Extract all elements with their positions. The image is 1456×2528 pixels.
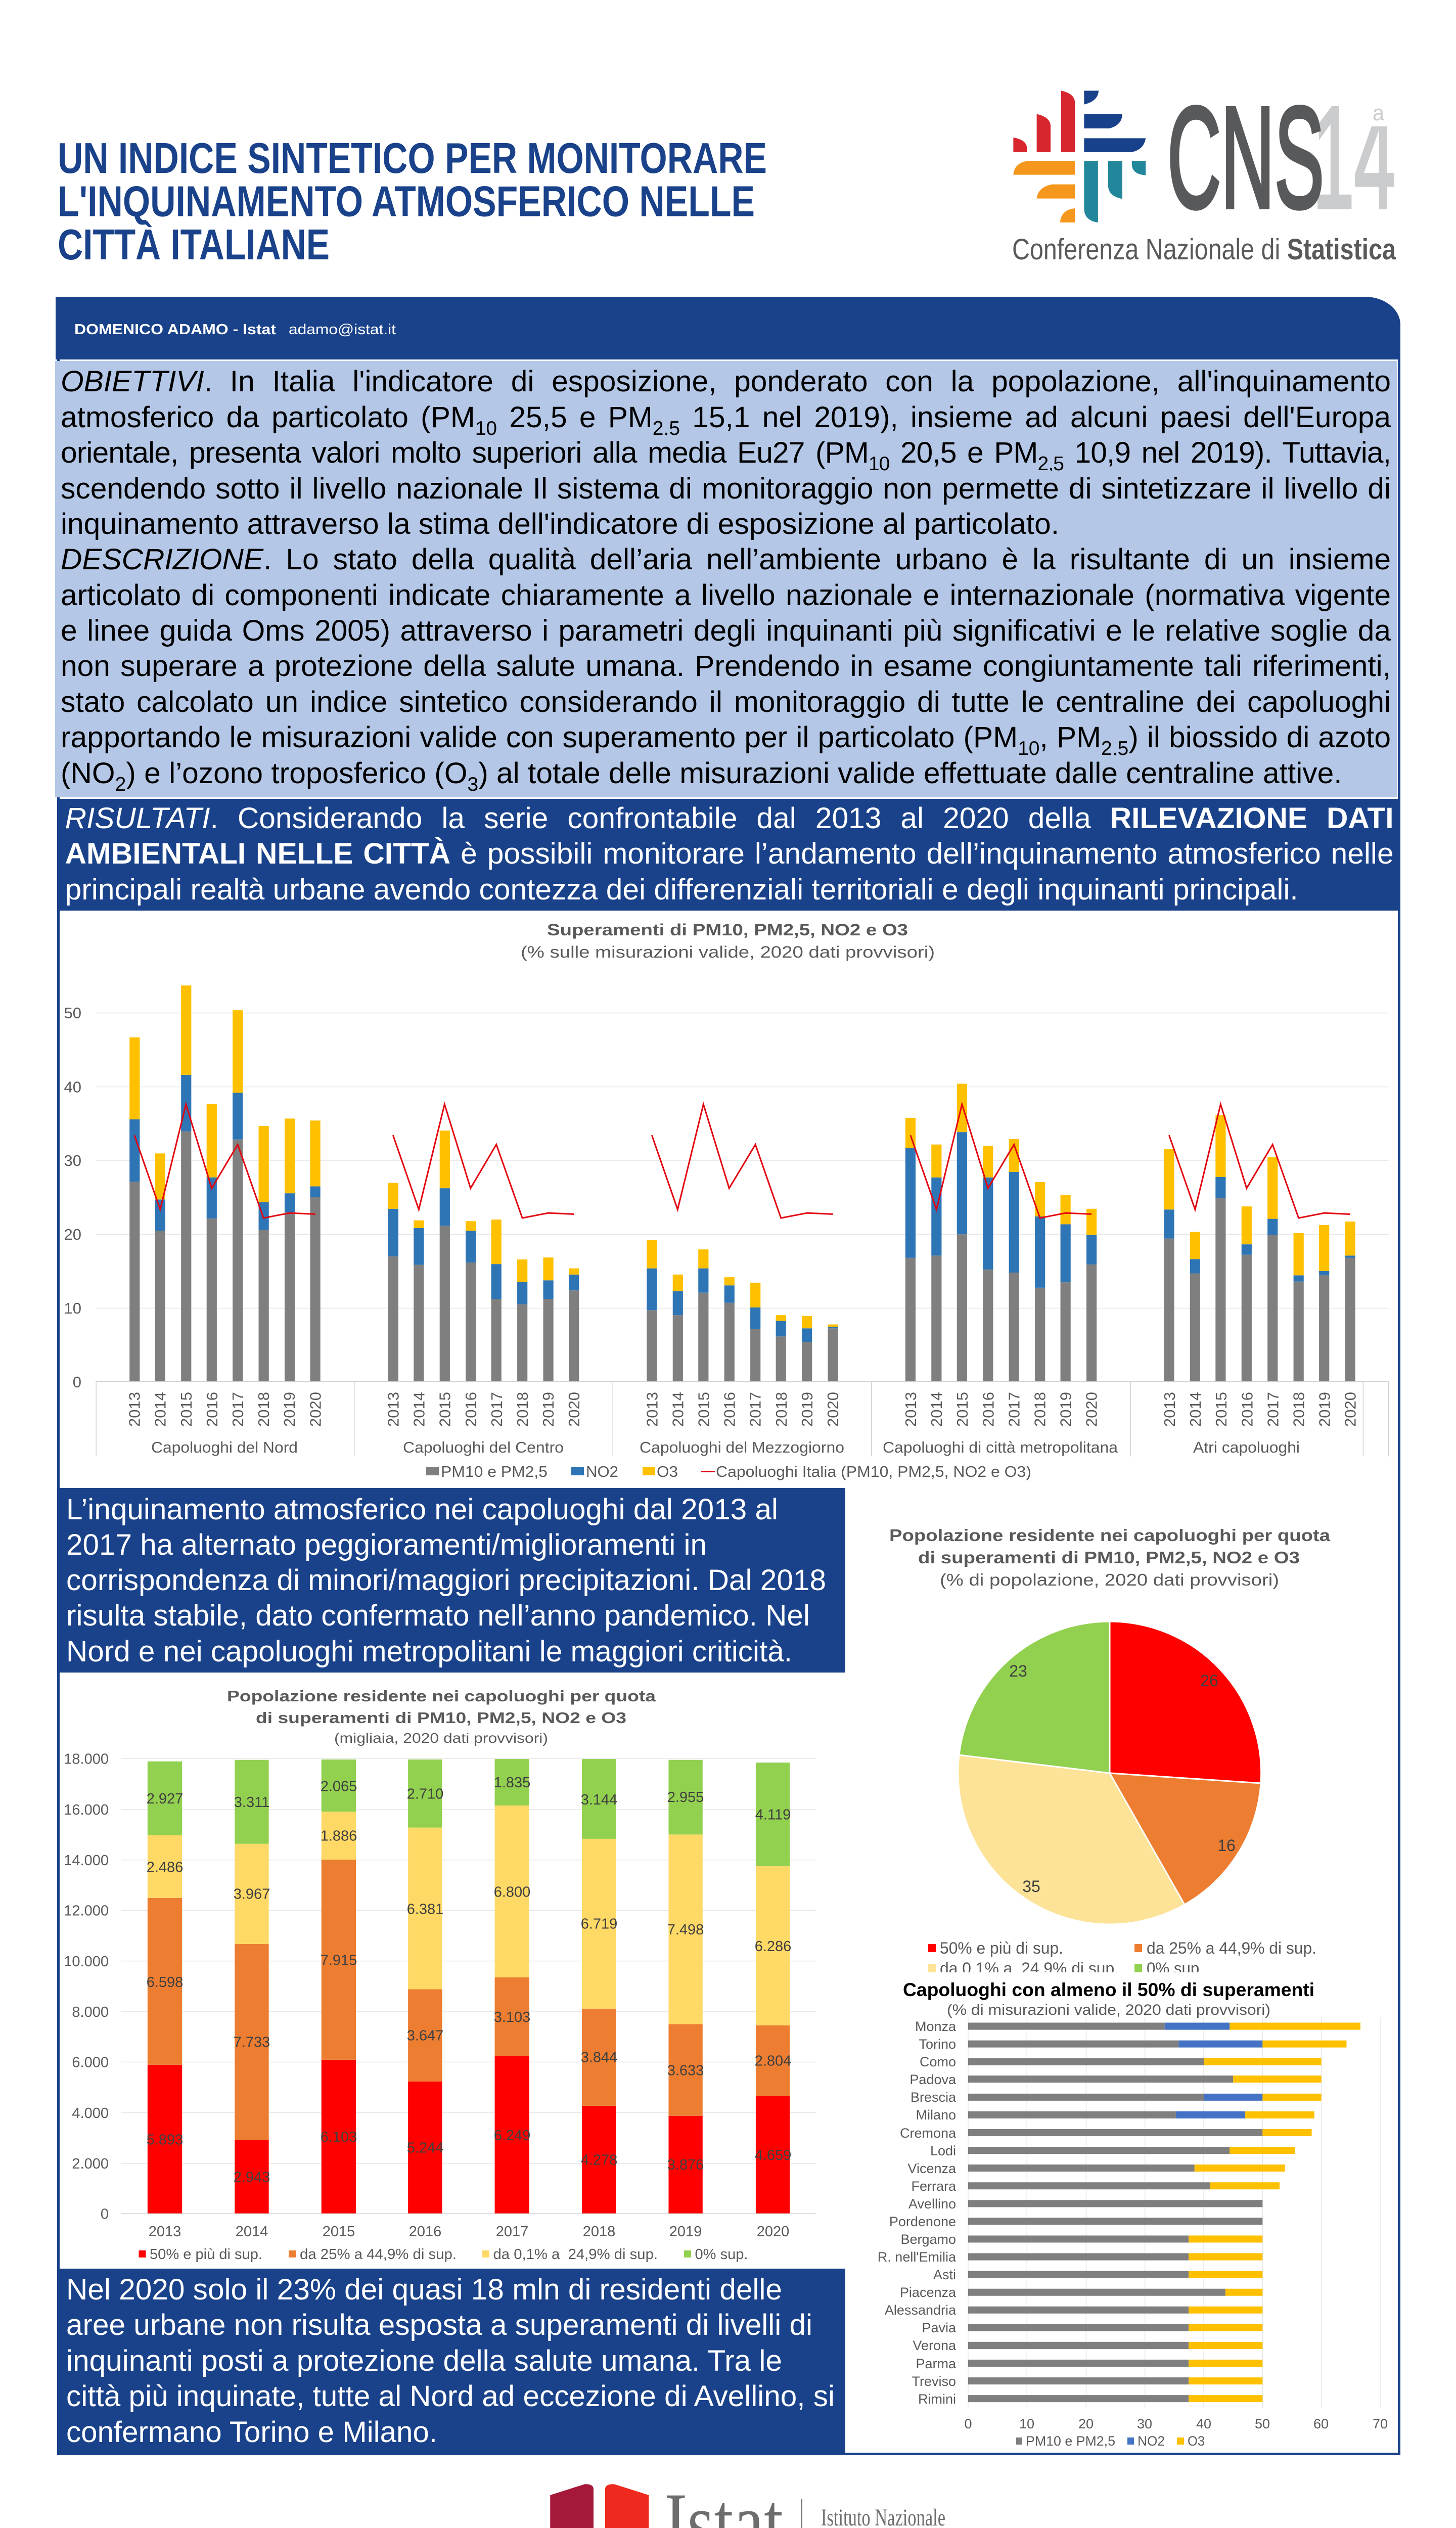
chart title: Superamenti di PM10, PM2,5, NO2 e O3	[547, 921, 908, 939]
x axis categories: Capoluoghi del Mezzogiorno	[640, 1438, 844, 1456]
x axis years: 2015	[695, 1392, 713, 1427]
chart title: di superamenti di PM10, PM2,5, NO2 e O3	[918, 1548, 1300, 1567]
pie labels: 26	[1200, 1672, 1218, 1690]
y axis labels: 50	[64, 1004, 81, 1022]
series: PM10 e PM2,5	[968, 2023, 1262, 2402]
callout: 2020 residenti: inquinanti posti a protezione della salute umana. Tra le	[66, 2344, 782, 2377]
x axis years: 2014	[236, 2224, 268, 2240]
chart: popolazione residente pie	[889, 1526, 1331, 1977]
x axis years: 2018	[583, 2224, 615, 2240]
x axis categories	[151, 1438, 1300, 1456]
data labels: 4.278	[581, 2152, 617, 2168]
x axis years: 2017	[496, 2224, 528, 2240]
title: UN INDICE SINTETICO PER MONITORARE	[58, 134, 767, 183]
x axis years: 2013	[149, 2224, 181, 2240]
y axis labels	[64, 1751, 109, 2223]
pie legend: da 0,1% a 24,9% di sup.	[940, 1959, 1119, 1977]
callout: 2020 residenti	[57, 2269, 845, 2455]
y axis labels: 14.000	[64, 1853, 109, 1869]
callout: andamento 2013-2020: corrispondenza di minori/maggiori precipitazioni. Dal 2018	[66, 1564, 826, 1597]
callout: 2020 residenti: Nel 2020 solo il 23% dei quasi 18 mln di residenti delle	[66, 2273, 782, 2306]
x axis labels: 50	[1255, 2416, 1270, 2431]
x axis labels: 0	[964, 2416, 972, 2431]
plot area: stacked bars and line	[96, 985, 1389, 1457]
panel: obiettivi e descrizione: OBIETTIVI. In Italia l'indicatore di esposizione, ponderato con la popolazione, all'inquinamento	[61, 365, 1391, 398]
series: 50% e più di sup.	[148, 2056, 790, 2214]
x axis labels: 10	[1019, 2416, 1034, 2431]
series: NO2	[129, 1075, 1355, 1342]
data labels: 3.103	[494, 2009, 530, 2025]
city labels: Pavia	[922, 2320, 957, 2335]
callout: andamento 2013-2020	[60, 1488, 845, 1673]
x axis years: 2017	[1264, 1392, 1282, 1427]
page frame	[57, 359, 1400, 2455]
data labels: 3.633	[667, 2063, 704, 2079]
chart title: (migliaia, 2020 dati provvisori)	[334, 1730, 548, 1746]
y axis labels: 4.000	[72, 2105, 109, 2121]
logo: Istat	[550, 2476, 945, 2528]
chart title: Popolazione residente nei capoluoghi per quota	[227, 1687, 656, 1705]
x axis years: 2016	[409, 2224, 441, 2240]
city labels: Verona	[913, 2338, 957, 2353]
chart legend: Capoluoghi Italia (PM10, PM2,5, NO2 e O3)	[716, 1463, 1031, 1480]
chart: popolazione residente stacked columns	[64, 1687, 816, 2263]
city labels: Vicenza	[907, 2161, 957, 2176]
chart title: (% di popolazione, 2020 dati provvisori)	[940, 1570, 1279, 1589]
x axis years: 2017	[747, 1392, 764, 1427]
x axis years: 2014	[669, 1392, 687, 1427]
chart legend: PM10 e PM2,5	[1026, 2433, 1115, 2449]
logo: CNS 14a Conferenza Nazionale di Statistica	[1012, 77, 1397, 266]
data labels: 6.381	[407, 1901, 443, 1917]
x axis years: 2015	[953, 1392, 971, 1427]
logo superscript a: a	[1373, 101, 1384, 125]
city labels: Lodi	[930, 2143, 956, 2158]
chart title	[227, 1687, 656, 1746]
city labels: Pordenone	[889, 2214, 956, 2229]
y axis labels: 40	[64, 1078, 81, 1096]
chart title: Capoluoghi con almeno il 50% di superamenti	[903, 1979, 1314, 2000]
header band: author	[56, 297, 1400, 359]
icon: Istat mark	[550, 2484, 649, 2528]
plot area: stacked columns	[121, 1758, 816, 2214]
data labels: 4.659	[755, 2147, 791, 2163]
data labels: 3.876	[667, 2157, 704, 2173]
y axis labels: 30	[64, 1152, 81, 1169]
x axis years: 2018	[1290, 1392, 1307, 1427]
panel: risultati: AMBIENTALI NELLE CITTÀ è possibili monitorare l’andamento dell’inquinamento atmosferico nelle	[65, 837, 1394, 870]
x axis labels: 70	[1373, 2416, 1388, 2431]
chart title: Popolazione residente nei capoluoghi per quota	[889, 1526, 1331, 1545]
pie legend: 0% sup.	[1147, 1959, 1204, 1977]
chart legend: da 25% a 44,9% di sup.	[300, 2246, 457, 2263]
chart subtitle: (% sulle misurazioni valide, 2020 dati provvisori)	[521, 943, 935, 961]
x axis years	[149, 2224, 789, 2240]
x axis years: 2017	[488, 1392, 506, 1427]
x axis years: 2015	[323, 2224, 355, 2240]
pie slices	[958, 1621, 1261, 1924]
panel: obiettivi e descrizione: scendendo sotto il livello nazionale Il sistema di monitoraggio non permette di sintetizzare il livello di	[61, 472, 1391, 505]
panel: obiettivi e descrizione: DESCRIZIONE. Lo stato della qualità dell’aria nell’ambiente urbano è la risultante di un insieme	[61, 543, 1391, 576]
panel: risultati: principali realtà urbane avendo contezza dei differenziali territoriali e degli inquinanti principali.	[65, 873, 1298, 906]
data labels: 3.844	[581, 2049, 617, 2065]
x axis categories: Capoluoghi del Nord	[151, 1438, 298, 1456]
x axis years: 2016	[979, 1392, 997, 1427]
city labels: Cremona	[900, 2126, 957, 2141]
logo caption: Conferenza Nazionale di Statistica	[1012, 233, 1396, 266]
x axis years: 2014	[411, 1392, 428, 1427]
data labels: 2.955	[667, 1789, 704, 1805]
callout: andamento 2013-2020: 2017 ha alternato peggioramenti/miglioramenti in	[66, 1528, 707, 1561]
series: da 25% a 44,9% di sup.	[148, 1860, 790, 2140]
x axis labels: 40	[1196, 2416, 1211, 2431]
callout: 2020 residenti: aree urbane non risulta esposta a superamenti di livelli di	[66, 2309, 812, 2341]
x axis labels: 30	[1137, 2416, 1152, 2431]
series: O3	[1189, 2023, 1360, 2402]
data labels: 2.710	[407, 1786, 443, 1802]
chart: Capoluoghi con almeno il 50% di superamenti	[870, 1972, 1395, 2449]
x axis years: 2015	[177, 1392, 195, 1427]
pie labels: 35	[1022, 1877, 1040, 1895]
x axis categories: Capoluoghi di città metropolitana	[883, 1438, 1118, 1456]
data labels: 7.915	[321, 1952, 357, 1968]
series: PM10 e PM2,5	[129, 1132, 1355, 1382]
pie labels: 16	[1217, 1836, 1236, 1855]
x axis categories: Capoluoghi del Centro	[403, 1438, 564, 1456]
data labels: 7.498	[667, 1922, 704, 1938]
data labels: 6.598	[147, 1974, 183, 1991]
x axis years: 2016	[203, 1392, 221, 1427]
city labels: Torino	[919, 2037, 956, 2052]
chart legend: 0% sup.	[695, 2246, 748, 2263]
icon: CNS mark	[1013, 91, 1146, 222]
callout: 2020 residenti: confermano Torino e Milano.	[66, 2416, 437, 2449]
x axis years: 2019	[1057, 1392, 1075, 1427]
pie labels	[1009, 1662, 1236, 1895]
x axis years: 2020	[306, 1392, 324, 1427]
chart legend: NO2	[586, 1463, 618, 1480]
x axis years: 2013	[384, 1392, 402, 1427]
chart title: di superamenti di PM10, PM2,5, NO2 e O3	[256, 1709, 626, 1727]
x axis labels	[964, 2416, 1388, 2431]
x axis years: 2020	[565, 1392, 583, 1427]
data labels: 6.103	[321, 2129, 357, 2145]
chart legend: O3	[657, 1463, 678, 1480]
city labels: Como	[920, 2054, 956, 2069]
title	[58, 134, 767, 269]
city labels: Asti	[933, 2267, 956, 2282]
data labels: 2.804	[755, 2053, 791, 2069]
data labels: 6.800	[494, 1884, 530, 1901]
x axis years: 2020	[824, 1392, 842, 1427]
y axis labels: 6.000	[72, 2055, 109, 2071]
callout: andamento 2013-2020: risulta stabile, dato confermato nell’anno pandemico. Nel	[66, 1599, 810, 1632]
data labels: 5.244	[407, 2140, 443, 2156]
y axis labels: 10	[64, 1299, 81, 1317]
x axis years: 2019	[669, 2224, 702, 2240]
callout: andamento 2013-2020: L’inquinamento atmosferico nei capoluoghi dal 2013 al	[66, 1493, 778, 1526]
data labels: 2.943	[234, 2170, 270, 2186]
data labels: 3.647	[407, 2028, 443, 2044]
city labels: Parma	[916, 2356, 957, 2371]
data labels	[147, 1775, 791, 2186]
x axis years: 2017	[1005, 1392, 1023, 1427]
data labels: 2.927	[147, 1791, 183, 1807]
data labels: 6.286	[755, 1938, 791, 1955]
plot area: horizontal stacked bars	[968, 2017, 1380, 2408]
x axis years: 2020	[757, 2224, 789, 2240]
x axis years: 2018	[1031, 1392, 1049, 1427]
y axis labels: 0	[101, 2206, 109, 2223]
city labels: Rimini	[918, 2391, 956, 2407]
chart legend: da 0,1% a 24,9% di sup.	[493, 2246, 658, 2263]
x axis labels: 60	[1313, 2416, 1329, 2431]
x axis years: 2013	[643, 1392, 661, 1427]
callout: andamento 2013-2020: Nord e nei capoluoghi metropolitani le maggiori criticità.	[66, 1635, 792, 1668]
panel: obiettivi e descrizione: inquinamento attraverso la stima dell'indicatore di esposizione al particolato.	[61, 508, 1059, 540]
x axis years	[126, 1392, 1359, 1427]
city labels: Ferrara	[911, 2179, 957, 2194]
x axis years: 2013	[126, 1392, 144, 1427]
series: da 0,1% a 24,9% di sup.	[148, 1805, 790, 2025]
title: CITTÀ ITALIANE	[58, 221, 330, 269]
x axis years: 2015	[436, 1392, 454, 1427]
chart: Superamenti di PM10, PM2,5, NO2 e O3	[64, 921, 1389, 1480]
city labels: Padova	[909, 2072, 957, 2087]
chart legend: O3	[1188, 2433, 1205, 2449]
data labels: 3.967	[234, 1886, 270, 1902]
x axis categories: Atri capoluoghi	[1193, 1438, 1300, 1456]
x axis years: 2016	[462, 1392, 480, 1427]
city labels: Alessandria	[885, 2303, 957, 2318]
panel: obiettivi e descrizione	[55, 361, 1397, 797]
city labels: Monza	[915, 2019, 957, 2034]
series: NO2	[1165, 2023, 1262, 2118]
x axis years: 2018	[255, 1392, 272, 1427]
y axis labels: 2.000	[72, 2156, 109, 2172]
pie legend	[928, 1939, 1316, 1977]
data labels: 7.733	[234, 2035, 270, 2051]
y axis labels: 8.000	[72, 2004, 109, 2020]
series: O3	[129, 985, 1355, 1328]
city labels: Brescia	[911, 2090, 957, 2105]
y axis labels: 16.000	[64, 1802, 109, 1818]
x axis years: 2018	[514, 1392, 531, 1427]
y axis labels: 12.000	[64, 1903, 109, 1919]
data labels: 6.249	[494, 2128, 530, 2144]
y axis labels: 18.000	[64, 1751, 109, 1768]
x axis years: 2016	[1238, 1392, 1256, 1427]
panel: risultati	[59, 799, 1400, 911]
y axis labels: 0	[73, 1373, 81, 1391]
chart legend	[1016, 2433, 1205, 2449]
chart legend	[426, 1463, 1031, 1480]
pie legend: 50% e più di sup.	[940, 1939, 1063, 1957]
x axis years: 2013	[1161, 1392, 1178, 1427]
chart legend: PM10 e PM2,5	[441, 1463, 548, 1480]
panel: obiettivi e descrizione: e linee guida Oms 2005) attraverso i parametri degli inquinanti più significativi e le relative soglie da	[61, 614, 1391, 647]
city labels: Piacenza	[900, 2285, 957, 2300]
data labels: 1.835	[494, 1775, 530, 1791]
y axis labels: 20	[64, 1226, 81, 1243]
data labels: 4.119	[755, 1807, 791, 1823]
x axis years: 2014	[1187, 1392, 1204, 1427]
x axis years: 2013	[902, 1392, 920, 1427]
pie labels: 23	[1009, 1662, 1027, 1680]
x axis years: 2019	[1316, 1392, 1334, 1427]
data labels: 2.486	[147, 1860, 183, 1876]
series: Capoluoghi Italia line	[134, 1104, 1350, 1218]
data labels: 5.893	[147, 2132, 183, 2148]
title: L'INQUINAMENTO ATMOSFERICO NELLE	[58, 178, 755, 225]
chart subtitle: (% di misurazioni valide, 2020 dati provvisori)	[947, 2002, 1270, 2018]
author name: DOMENICO ADAMO - Istat	[74, 322, 276, 338]
data labels: 1.886	[321, 1828, 357, 1844]
panel: obiettivi e descrizione: stato calcolato un indice sintetico considerando il monitoraggio di tutte le centraline dei capoluoghi	[61, 686, 1391, 718]
data labels: 2.065	[321, 1779, 357, 1795]
city labels: Bergamo	[900, 2232, 956, 2247]
x axis years: 2017	[229, 1392, 247, 1427]
x axis years: 2018	[772, 1392, 790, 1427]
pie legend: da 25% a 44,9% di sup.	[1147, 1939, 1316, 1957]
x axis years: 2019	[539, 1392, 557, 1427]
chart legend	[139, 2246, 748, 2263]
city labels	[878, 2019, 957, 2407]
x axis years: 2019	[798, 1392, 816, 1427]
chart title	[889, 1526, 1331, 1589]
x axis years: 2020	[1342, 1392, 1359, 1427]
data labels: 3.311	[234, 1794, 269, 1811]
y axis labels	[64, 1004, 81, 1391]
chart legend: 50% e più di sup.	[150, 2246, 262, 2263]
panel: risultati: RISULTATI. Considerando la serie confrontabile dal 2013 al 2020 della RILEVAZIONE DATI	[65, 802, 1394, 835]
data labels: 6.719	[581, 1916, 617, 1932]
x axis years: 2016	[721, 1392, 739, 1427]
x axis years: 2019	[281, 1392, 298, 1427]
series: 0% sup.	[148, 1759, 790, 1866]
x axis years: 2014	[928, 1392, 945, 1427]
city labels: R. nell'Emilia	[878, 2249, 957, 2265]
data labels: 3.144	[581, 1792, 617, 1808]
callout: 2020 residenti: città più inquinate, tutte al Nord ad eccezione di Avellino, si	[66, 2380, 835, 2413]
x axis labels: 20	[1078, 2416, 1094, 2431]
chart legend: NO2	[1138, 2433, 1165, 2449]
y axis labels: 10.000	[64, 1954, 109, 1970]
city labels: Avellino	[908, 2196, 956, 2211]
x axis years: 2014	[152, 1392, 169, 1427]
panel: obiettivi e descrizione: articolato di componenti indicate chiaramente a livello nazionale e internazionale (normativa vigente	[61, 579, 1391, 612]
x axis years: 2015	[1212, 1392, 1230, 1427]
x axis years: 2020	[1083, 1392, 1101, 1427]
city labels: Milano	[916, 2107, 956, 2123]
city labels: Treviso	[912, 2374, 956, 2389]
author email: adamo@istat.it	[289, 322, 396, 338]
